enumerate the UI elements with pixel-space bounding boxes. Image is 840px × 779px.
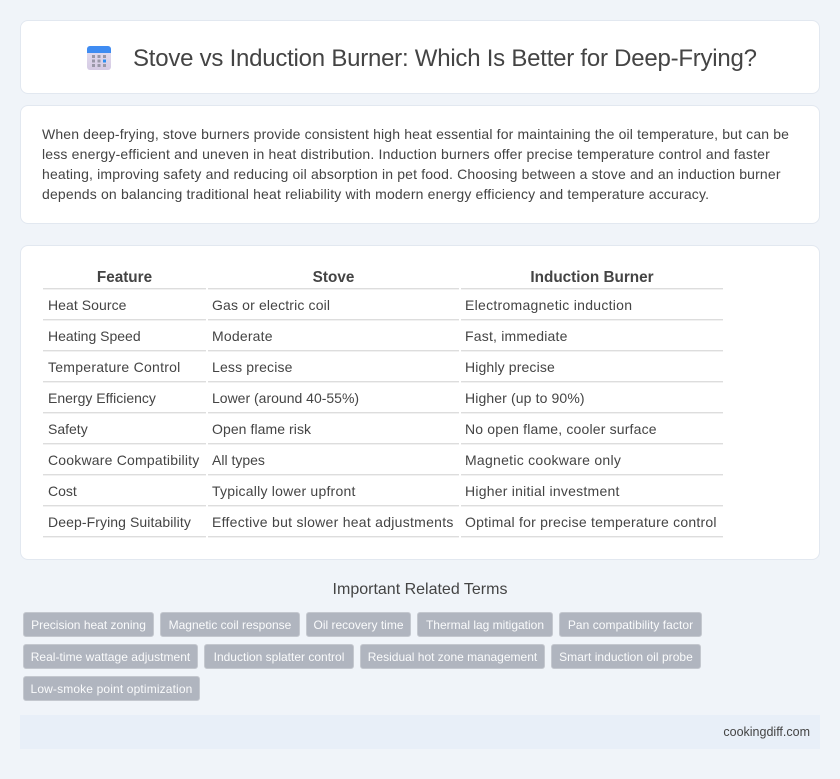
- tags: related terms: [23, 612, 702, 701]
- row: cookware compatibility: [48, 452, 621, 468]
- row: cost: Typically lower upfront: [212, 483, 356, 499]
- heading: important related terms: Important Related Terms: [333, 581, 507, 598]
- text block: summary: heating, improving safety and reducing oil absorption in pet food. Choosing between a stove and an induction burner: [42, 166, 781, 182]
- title: Stove vs Induction Burner: Which Is Better for Deep-Frying?: [133, 45, 757, 72]
- row: temperature control: Less precise: [212, 359, 293, 375]
- row: temperature control: Highly precise: [465, 359, 555, 375]
- row: heating speed: Moderate: [212, 328, 273, 344]
- table header row: Stove: [313, 269, 354, 286]
- text block: summary: [42, 126, 789, 202]
- tags: related terms: Magnetic coil response: [169, 618, 291, 632]
- row: safety: [48, 421, 657, 437]
- footer: [20, 715, 820, 749]
- panel: comparison table: [20, 245, 820, 560]
- table header row: Induction Burner: [530, 269, 654, 286]
- tags: related terms: Smart induction oil probe: [559, 650, 693, 664]
- panel: summary text: [20, 105, 820, 224]
- tags: related terms: Precision heat zoning: [31, 618, 146, 632]
- tags: related terms: Low-smoke point optimization: [30, 682, 192, 696]
- row: deep-frying suitability: Deep-Frying Suitability: [48, 514, 191, 530]
- row: cost: [48, 483, 620, 499]
- tags: related terms: Induction splatter control: [214, 650, 344, 664]
- row: heat source: [48, 297, 632, 313]
- row: deep-frying suitability: Optimal for precise temperature control: [465, 514, 717, 530]
- row: cost: Higher initial investment: [465, 483, 620, 499]
- row: energy efficiency: Energy Efficiency: [48, 390, 156, 406]
- row: cost: Cost: [48, 483, 77, 499]
- row: energy efficiency: [48, 390, 585, 406]
- row: heating speed: Heating Speed: [48, 328, 141, 344]
- tags: related terms: Thermal lag mitigation: [426, 618, 544, 632]
- table header row: Feature: [97, 269, 152, 286]
- icon: calendar: [87, 46, 111, 70]
- row: deep-frying suitability: Effective but slower heat adjustments: [212, 514, 454, 530]
- row: safety: Open flame risk: [212, 421, 311, 437]
- row: cookware compatibility: All types: [212, 452, 265, 468]
- tags: related terms: Residual hot zone management: [368, 650, 537, 664]
- row: heat source: Gas or electric coil: [212, 297, 330, 313]
- tags: related terms: Real-time wattage adjustment: [31, 650, 190, 664]
- row: deep-frying suitability: [48, 514, 717, 530]
- tags: related terms: Oil recovery time: [313, 618, 404, 632]
- row: temperature control: [48, 359, 555, 375]
- row: safety: Safety: [48, 421, 88, 437]
- row: heating speed: Fast, immediate: [465, 328, 568, 344]
- tags: related terms: Pan compatibility factor: [568, 618, 693, 632]
- row: energy efficiency: Lower (around 40-55%): [212, 390, 359, 406]
- row: safety: No open flame, cooler surface: [465, 421, 657, 437]
- footer credit: cookingdiff.com: [723, 725, 810, 739]
- text block: summary: When deep-frying, stove burners provide consistent high heat essential for maintaining the oil temperature, but can be: [42, 126, 789, 142]
- row: heat source: Electromagnetic induction: [465, 297, 632, 313]
- row: heat source: Heat Source: [48, 297, 126, 313]
- text block: summary: depends on balancing traditional heat reliability with modern energy efficiency and temperature accuracy.: [42, 186, 709, 202]
- text block: summary: less energy-efficient and uneven in heat distribution. Induction burners offer precise temperature control and faster: [42, 146, 770, 162]
- row: heating speed: [48, 328, 568, 344]
- row: cookware compatibility: Cookware Compatibility: [48, 452, 199, 468]
- row: energy efficiency: Higher (up to 90%): [465, 390, 585, 406]
- panel: header: [20, 20, 820, 94]
- row: temperature control: Temperature Control: [48, 359, 181, 375]
- row: cookware compatibility: Magnetic cookware only: [465, 452, 621, 468]
- table header row: [97, 269, 654, 286]
